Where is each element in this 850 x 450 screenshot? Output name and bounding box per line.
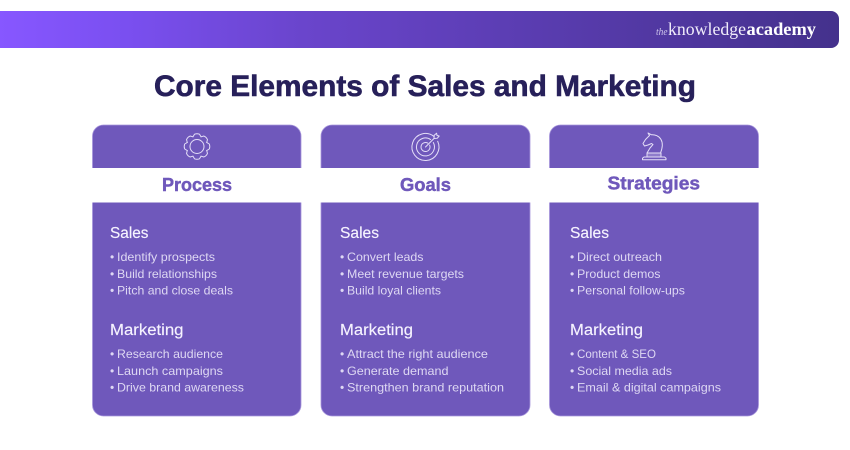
goals: sales list: •: [340, 267, 344, 281]
goals heading band: [320, 168, 530, 202]
goals: marketing list: •: [340, 380, 344, 394]
panel: strategies: [549, 125, 759, 416]
process: sales list: •: [110, 284, 114, 298]
goals: sales list: Sales: [340, 225, 379, 242]
process: marketing list: Marketing: [110, 322, 184, 339]
process: marketing list: Launch campaigns: [117, 364, 223, 378]
strategies: sales list: •: [570, 284, 574, 298]
strategies: sales list: •: [570, 250, 574, 264]
strategies heading band: Strategies: [608, 172, 700, 194]
title: Core Elements of Sales and Marketing: [154, 70, 696, 103]
goals: sales list: Meet revenue targets: [347, 267, 464, 281]
icon: gear: [184, 134, 210, 159]
process: sales list: Build relationships: [117, 267, 217, 281]
goals: marketing list: Strengthen brand reputation: [347, 380, 504, 394]
strategies: marketing list: Email & digital campaigns: [577, 380, 721, 394]
icon: target with arrow: [412, 133, 439, 160]
process: sales list: [110, 225, 233, 298]
goals: marketing list: •: [340, 364, 344, 378]
process: sales list: Pitch and close deals: [117, 284, 233, 298]
goals: sales list: Convert leads: [347, 250, 424, 264]
goals heading band: Goals: [400, 174, 451, 195]
strategies: marketing list: Social media ads: [577, 364, 672, 378]
goals: marketing list: •: [340, 347, 344, 361]
goals: sales list: •: [340, 250, 344, 264]
strategies: marketing list: •: [570, 364, 574, 378]
process: sales list: Sales: [110, 225, 149, 242]
process card background: [92, 125, 301, 416]
goals: marketing list: Generate demand: [347, 364, 448, 378]
goals: marketing list: Marketing: [340, 322, 413, 339]
goals: marketing list: Attract the right audience: [347, 347, 488, 361]
strategies: marketing list: •: [570, 347, 574, 361]
goals: sales list: [340, 225, 464, 298]
panel: goals: [320, 125, 530, 416]
goals: marketing list: [340, 322, 504, 394]
process: sales list: •: [110, 250, 114, 264]
strategies: sales list: Product demos: [577, 267, 660, 281]
header bar: [0, 11, 839, 48]
process: marketing list: [110, 322, 244, 394]
strategies card background: [550, 125, 758, 416]
logo: the knowledge academy: knowledge: [668, 19, 746, 39]
process: marketing list: Research audience: [117, 347, 223, 361]
strategies: sales list: Direct outreach: [577, 250, 662, 264]
process: sales list: Identify prospects: [117, 250, 215, 264]
logo: the knowledge academy: [656, 19, 816, 39]
strategies: marketing list: Marketing: [570, 322, 643, 339]
goals: sales list: •: [340, 284, 344, 298]
strategies: marketing list: •: [570, 380, 574, 394]
logo: the knowledge academy: the: [656, 26, 668, 38]
strategies: sales list: Personal follow-ups: [577, 284, 685, 298]
process: sales list: •: [110, 267, 114, 281]
strategies heading band: [549, 168, 759, 202]
process: marketing list: •: [110, 347, 114, 361]
panel: process: [92, 125, 302, 416]
icon: chess knight: [642, 133, 666, 160]
process: marketing list: Drive brand awareness: [117, 380, 244, 394]
goals card background: [321, 125, 530, 416]
logo: the knowledge academy: academy: [746, 19, 816, 39]
process heading band: Process: [162, 174, 232, 195]
strategies: sales list: [570, 225, 685, 298]
strategies: marketing list: Content & SEO: [577, 347, 656, 361]
process: marketing list: •: [110, 364, 114, 378]
goals: sales list: Build loyal clients: [347, 284, 441, 298]
process heading band: [92, 168, 302, 202]
strategies: marketing list: [570, 322, 721, 394]
strategies: sales list: •: [570, 267, 574, 281]
process: marketing list: •: [110, 380, 114, 394]
strategies: sales list: Sales: [570, 225, 609, 242]
